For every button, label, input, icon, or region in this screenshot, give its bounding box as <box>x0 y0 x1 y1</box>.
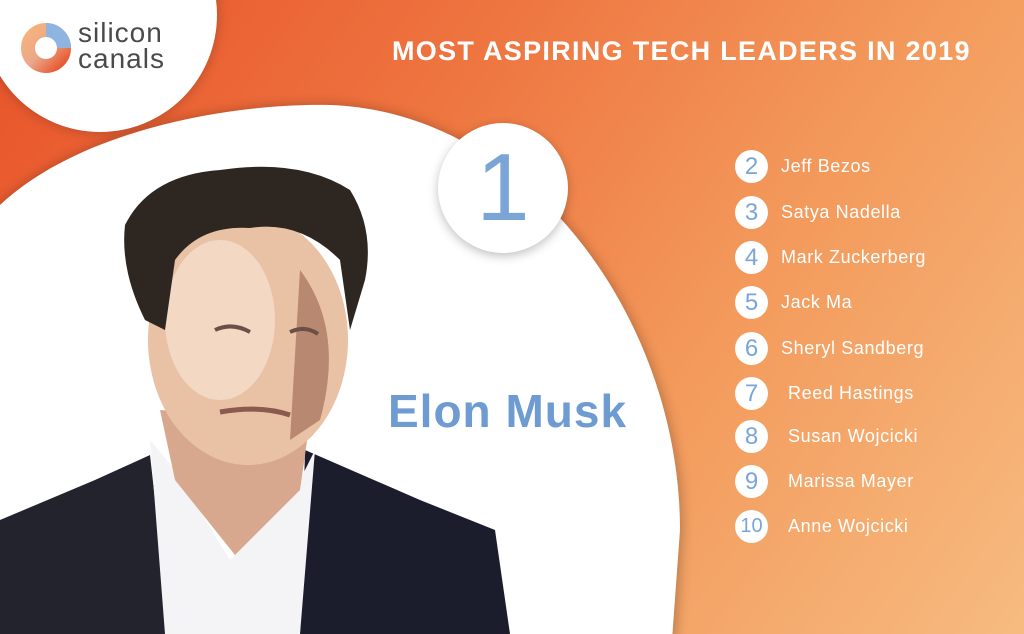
face <box>148 215 348 465</box>
item 5 <box>735 286 852 319</box>
item 6: Sheryl Sandberg <box>781 338 924 358</box>
item 10 <box>735 510 909 543</box>
item 4: 4 <box>745 244 758 271</box>
item 9: Marissa Mayer <box>788 471 914 491</box>
item 4: Mark Zuckerberg <box>781 247 926 267</box>
title: MOST ASPIRING TECH LEADERS IN 2019 <box>392 36 971 66</box>
item 8 <box>735 420 918 453</box>
item 3: Satya Nadella <box>781 202 901 222</box>
suit <box>0 455 170 634</box>
item 6 <box>735 332 924 365</box>
rank 1 badge <box>438 123 568 253</box>
item 5: Jack Ma <box>781 292 852 312</box>
item 9 <box>735 465 914 498</box>
neck <box>160 410 310 555</box>
ranking list <box>735 150 926 543</box>
item 9: 9 <box>745 468 758 495</box>
item 3 <box>735 196 901 229</box>
eyes / mouth <box>215 326 250 332</box>
item 7: Reed Hastings <box>788 383 914 403</box>
item 5: 5 <box>745 289 758 316</box>
item 8: Susan Wojcicki <box>788 426 918 446</box>
item 6: 6 <box>745 335 758 362</box>
item 8: 8 <box>745 423 758 450</box>
item 7: 7 <box>745 380 758 407</box>
item 7 <box>735 377 914 410</box>
shirt <box>150 440 315 634</box>
logo: silicon <box>78 17 163 48</box>
hair <box>124 167 368 330</box>
portrait illustration <box>0 166 510 634</box>
logo <box>21 17 165 74</box>
logo: canals <box>78 43 165 74</box>
icon: logo ring <box>21 23 71 73</box>
item 2: 2 <box>745 153 758 180</box>
item 10: Anne Wojcicki <box>788 516 909 536</box>
rank 1 badge: 1 <box>476 134 530 241</box>
item 2 <box>735 150 871 183</box>
item 3: 3 <box>745 199 758 226</box>
name: Elon Musk: Elon Musk <box>388 385 627 437</box>
item 2: Jeff Bezos <box>781 156 871 176</box>
item 4 <box>735 241 926 274</box>
item 10: 10 <box>740 515 763 537</box>
